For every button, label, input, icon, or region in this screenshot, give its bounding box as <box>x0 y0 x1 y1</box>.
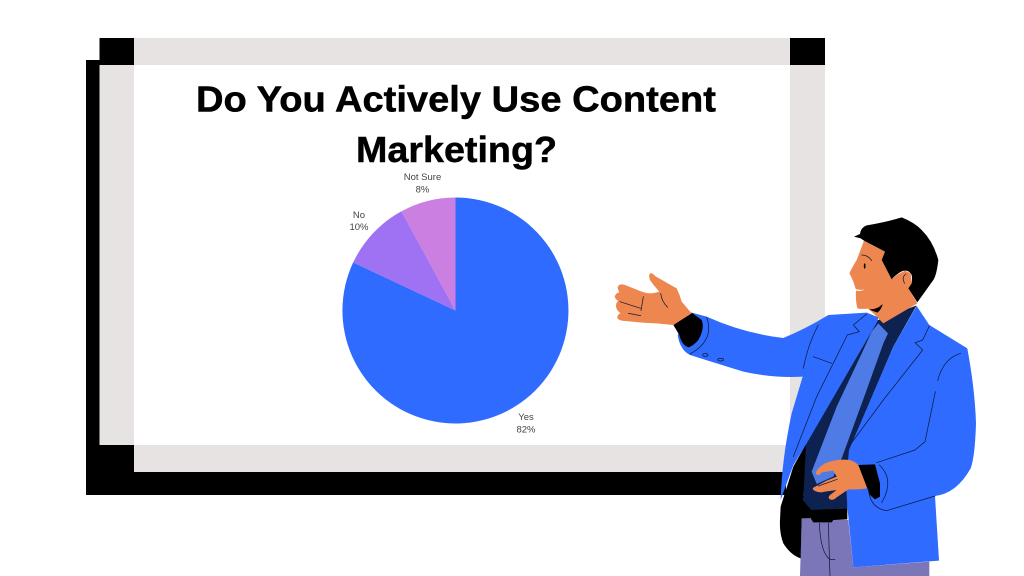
pie slice: Not Sure 8% <box>402 198 456 310</box>
hand: right at waist <box>813 460 867 500</box>
label: No: 10% <box>349 222 369 233</box>
suit and skin line details <box>620 255 961 576</box>
belt <box>811 508 847 522</box>
sleeve cuff inner <box>673 313 703 347</box>
title <box>196 78 716 170</box>
label: Yes: Yes <box>518 412 534 423</box>
tie <box>812 323 888 484</box>
hand: left outstretched <box>615 273 692 325</box>
pie slice: No 10% <box>353 211 456 310</box>
illustration: presenter in blue suit <box>615 217 976 576</box>
face <box>849 241 917 323</box>
chin shadow <box>869 304 883 313</box>
eye <box>864 263 865 269</box>
pie chart <box>342 172 568 436</box>
label: No: No <box>353 210 365 221</box>
label: Yes: 82% <box>516 424 536 436</box>
mouth <box>854 289 865 291</box>
jacket right front <box>846 306 976 567</box>
shirt <box>803 305 917 511</box>
title: Do You Actively Use Content <box>196 78 716 120</box>
label: Not Sure: Not Sure <box>404 172 441 183</box>
title: Marketing? <box>356 129 557 170</box>
label: Not Sure: 8% <box>416 184 430 196</box>
right wrist cuff <box>858 464 880 499</box>
panel: presentation screen frame <box>86 38 825 495</box>
pie slice: Yes 82% <box>342 198 568 423</box>
jacket <box>678 313 878 500</box>
pants <box>800 518 929 576</box>
jacket lining <box>780 442 812 558</box>
hair <box>854 217 938 302</box>
